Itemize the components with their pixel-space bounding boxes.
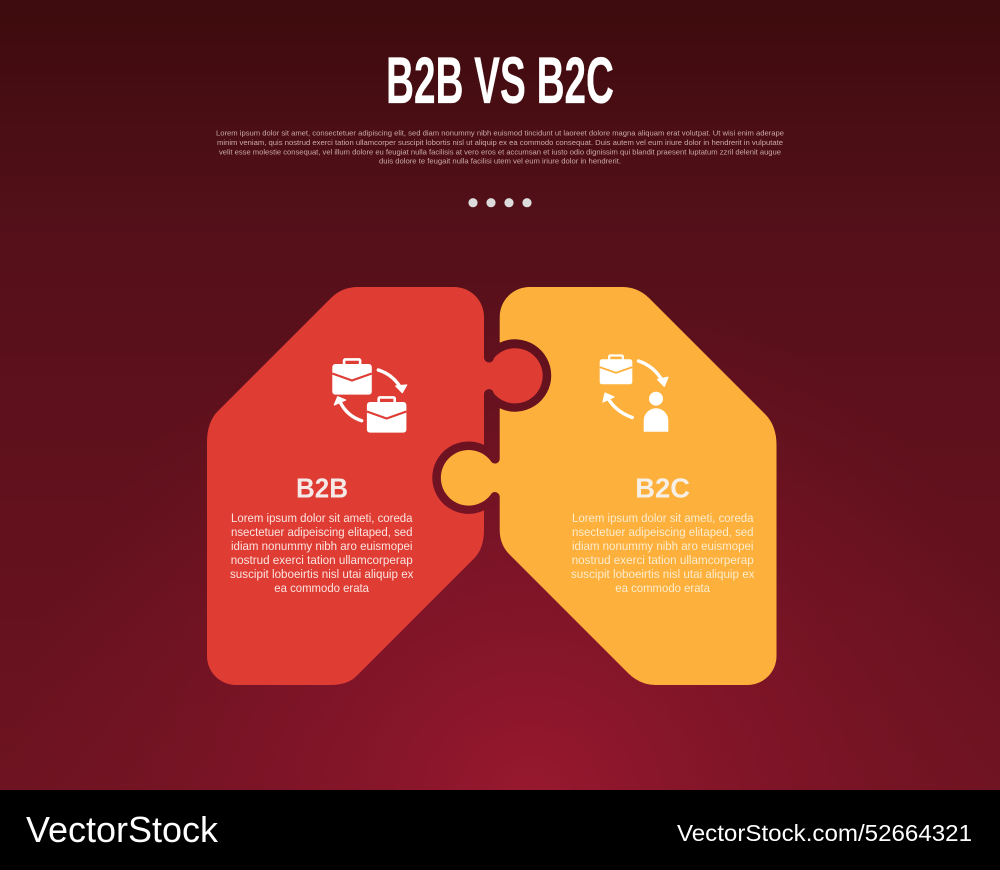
icon: briefcases exchanging <box>332 359 407 433</box>
intro text block: minim veniam, quis nostrud exerci tation ullamcorper suscipit lobortis nisl ut aliquip ex ea commodo consequat. Duis autem vel eum iriure dolor in hendrerit in vulputate <box>217 138 783 147</box>
icon: briefcase bottom <box>367 397 406 433</box>
intro text block <box>216 128 784 166</box>
heading: B2C: B2C <box>635 472 690 503</box>
text block: B2B description: nostrud exerci tation ullamcorperap <box>231 553 413 567</box>
text block: B2B description: idiam nonummy nibh aro euismopei <box>231 539 412 553</box>
title: B2B VS B2C <box>386 43 614 117</box>
arrow: briefcase to person <box>638 361 668 386</box>
text block: B2B description: Lorem ipsum dolor sit ameti, coreda <box>231 511 413 525</box>
text block: B2B description: nsectetuer adipeiscing elitaped, sed <box>231 525 413 539</box>
pagination dots <box>468 198 532 207</box>
text block: B2C description: nsectetuer adipeiscing elitaped, sed <box>572 525 754 539</box>
intro text block: duis dolore te feugait nulla facilisi utem vel eum iriure dolor in hendrerit. <box>379 157 621 166</box>
icon: briefcase top <box>332 359 372 395</box>
watermark image id: VectorStock.com/52664321 <box>677 820 972 846</box>
text block: B2C description: nostrud exerci tation ullamcorperap <box>572 553 754 567</box>
watermark bar <box>0 790 1000 870</box>
panel: B2B puzzle piece <box>207 287 543 685</box>
text block: B2C description: suscipit loboeirtis nisl utai aliquip ex <box>571 567 755 581</box>
intro text block: velit esse molestie consequat, vel illum dolore eu feugiat nulla facilisis at vero eros et accumsan et iusto odio dignissim qui blandit praesent luptatum zzril delenit augue <box>219 147 781 156</box>
text block: B2B description <box>230 511 414 595</box>
icon: briefcase <box>600 356 632 384</box>
icon: briefcase and person exchanging <box>600 356 668 432</box>
icon: person <box>644 392 668 432</box>
text block: B2B description: ea commodo erata <box>274 581 369 595</box>
text block: B2B description: suscipit loboeirtis nisl utai aliquip ex <box>230 567 414 581</box>
orange puzzle shape <box>441 287 776 685</box>
intro text block: Lorem ipsum dolor sit amet, consectetuer adipiscing elit, sed diam nonummy nibh euismod tincidunt ut laoreet dolore magna aliquam erat volutpat. Ut wisi enim aderape <box>216 128 784 138</box>
heading: B2B: B2B <box>296 472 348 503</box>
text block: B2C description: Lorem ipsum dolor sit ameti, coreda <box>572 511 754 525</box>
arrow: top to bottom <box>378 370 407 393</box>
arrow: bottom to top <box>334 397 362 421</box>
red puzzle shape <box>207 287 543 685</box>
arrow: person to briefcase <box>603 393 632 418</box>
text block: B2C description <box>571 511 755 595</box>
panel: B2C puzzle piece <box>441 287 776 685</box>
text block: B2C description: idiam nonummy nibh aro euismopei <box>572 539 754 553</box>
text block: B2C description: ea commodo erata <box>615 581 710 595</box>
watermark logo text: VectorStock <box>26 809 219 850</box>
